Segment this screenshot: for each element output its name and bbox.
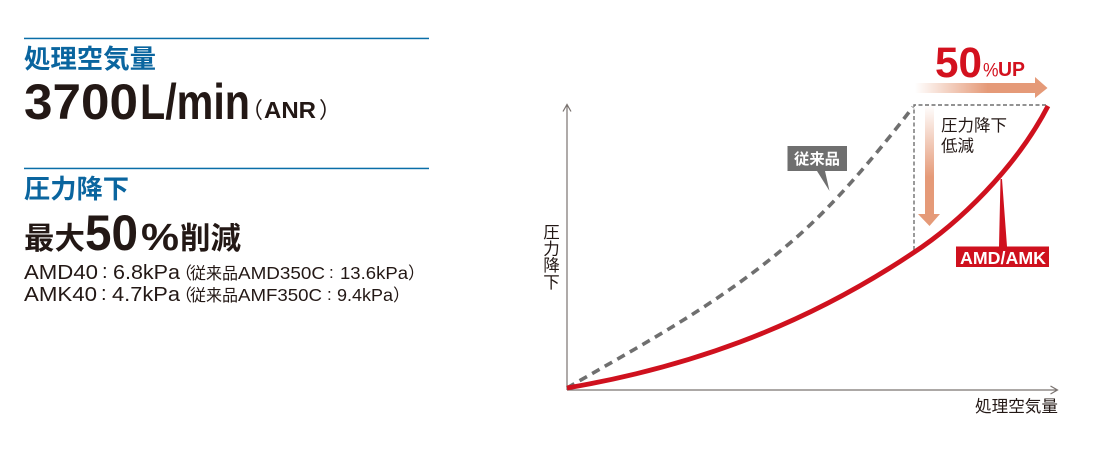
pressure drop headline: 削減 <box>180 222 241 256</box>
AMK40 data line: 4.7kPa <box>112 283 181 306</box>
y axis label: 圧 <box>543 224 560 242</box>
air flow value: 3700 <box>24 74 138 130</box>
air flow value <box>24 74 341 130</box>
AMK40 data line: AMF350C <box>238 285 322 305</box>
AMK40 data line: AMK40 <box>24 283 97 306</box>
guide lines <box>914 105 1046 250</box>
AMK40 data line: 9.4kPa <box>337 285 393 305</box>
callout: conventional product: 従来品 <box>794 151 840 168</box>
heading: pressure drop: 圧力降下 <box>24 174 129 204</box>
pressure reduction label: 圧力降下 <box>941 117 1007 135</box>
AMD40 data line: ） <box>408 264 425 283</box>
y axis label: 降 <box>543 256 560 275</box>
AMD40 data line: AMD350C <box>238 263 325 283</box>
pressure drop headline: 最大 <box>24 222 85 256</box>
air flow value: L/min <box>140 74 250 130</box>
AMD40 data line: （ <box>175 264 192 283</box>
callout: AMD/AMK <box>956 179 1049 268</box>
pressure drop headline: % <box>141 217 179 259</box>
AMK40 data line: （ <box>175 286 192 305</box>
AMD40 data line: AMD40 <box>24 261 98 284</box>
pressure drop headline: 50 <box>85 205 138 261</box>
AMD40 data line <box>24 261 425 284</box>
y axis label <box>543 224 560 292</box>
AMK40 data line: 従来品 <box>190 287 238 305</box>
50% up label: UP <box>998 59 1025 81</box>
50% up label: % <box>983 60 999 82</box>
AMD40 data line: 6.8kPa <box>113 261 181 284</box>
air flow value: （ <box>241 98 263 123</box>
heading: air flow: 処理空気量 <box>24 44 156 74</box>
pressure drop headline <box>24 205 241 261</box>
50% up horizontal arrow <box>915 77 1048 98</box>
air flow value: ） <box>319 98 341 123</box>
y axis label: 下 <box>543 274 560 292</box>
AMK40 data line: : <box>327 285 332 304</box>
AMD40 data line: : <box>329 263 334 282</box>
AMD40 data line: 13.6kPa <box>340 263 408 283</box>
pressure reduction label <box>941 117 1007 156</box>
AMK40 data line: : <box>101 283 107 305</box>
conventional product dashed curve <box>567 107 913 388</box>
AMD/AMK red curve <box>567 106 1048 388</box>
callout: conventional product <box>788 146 847 191</box>
callout: AMD/AMK: AMD/AMK <box>960 248 1046 268</box>
pressure reduction vertical arrow <box>918 105 940 226</box>
air flow value: ANR <box>264 97 316 123</box>
panel: air flow spec <box>24 38 429 130</box>
panel: pressure drop spec <box>24 168 429 306</box>
x axis label: 処理空気量 <box>975 397 1058 416</box>
50% up label <box>935 40 1025 87</box>
chart axes <box>563 104 1058 394</box>
chart: pressure drop vs air flow <box>543 40 1058 416</box>
50% up label: 50 <box>935 40 982 87</box>
pressure reduction label: 低減 <box>941 138 974 156</box>
AMD40 data line: 従来品 <box>190 265 238 283</box>
y axis label: 力 <box>543 240 560 258</box>
AMD40 data line: : <box>102 261 108 283</box>
AMK40 data line <box>24 283 410 306</box>
AMK40 data line: ） <box>393 286 410 305</box>
